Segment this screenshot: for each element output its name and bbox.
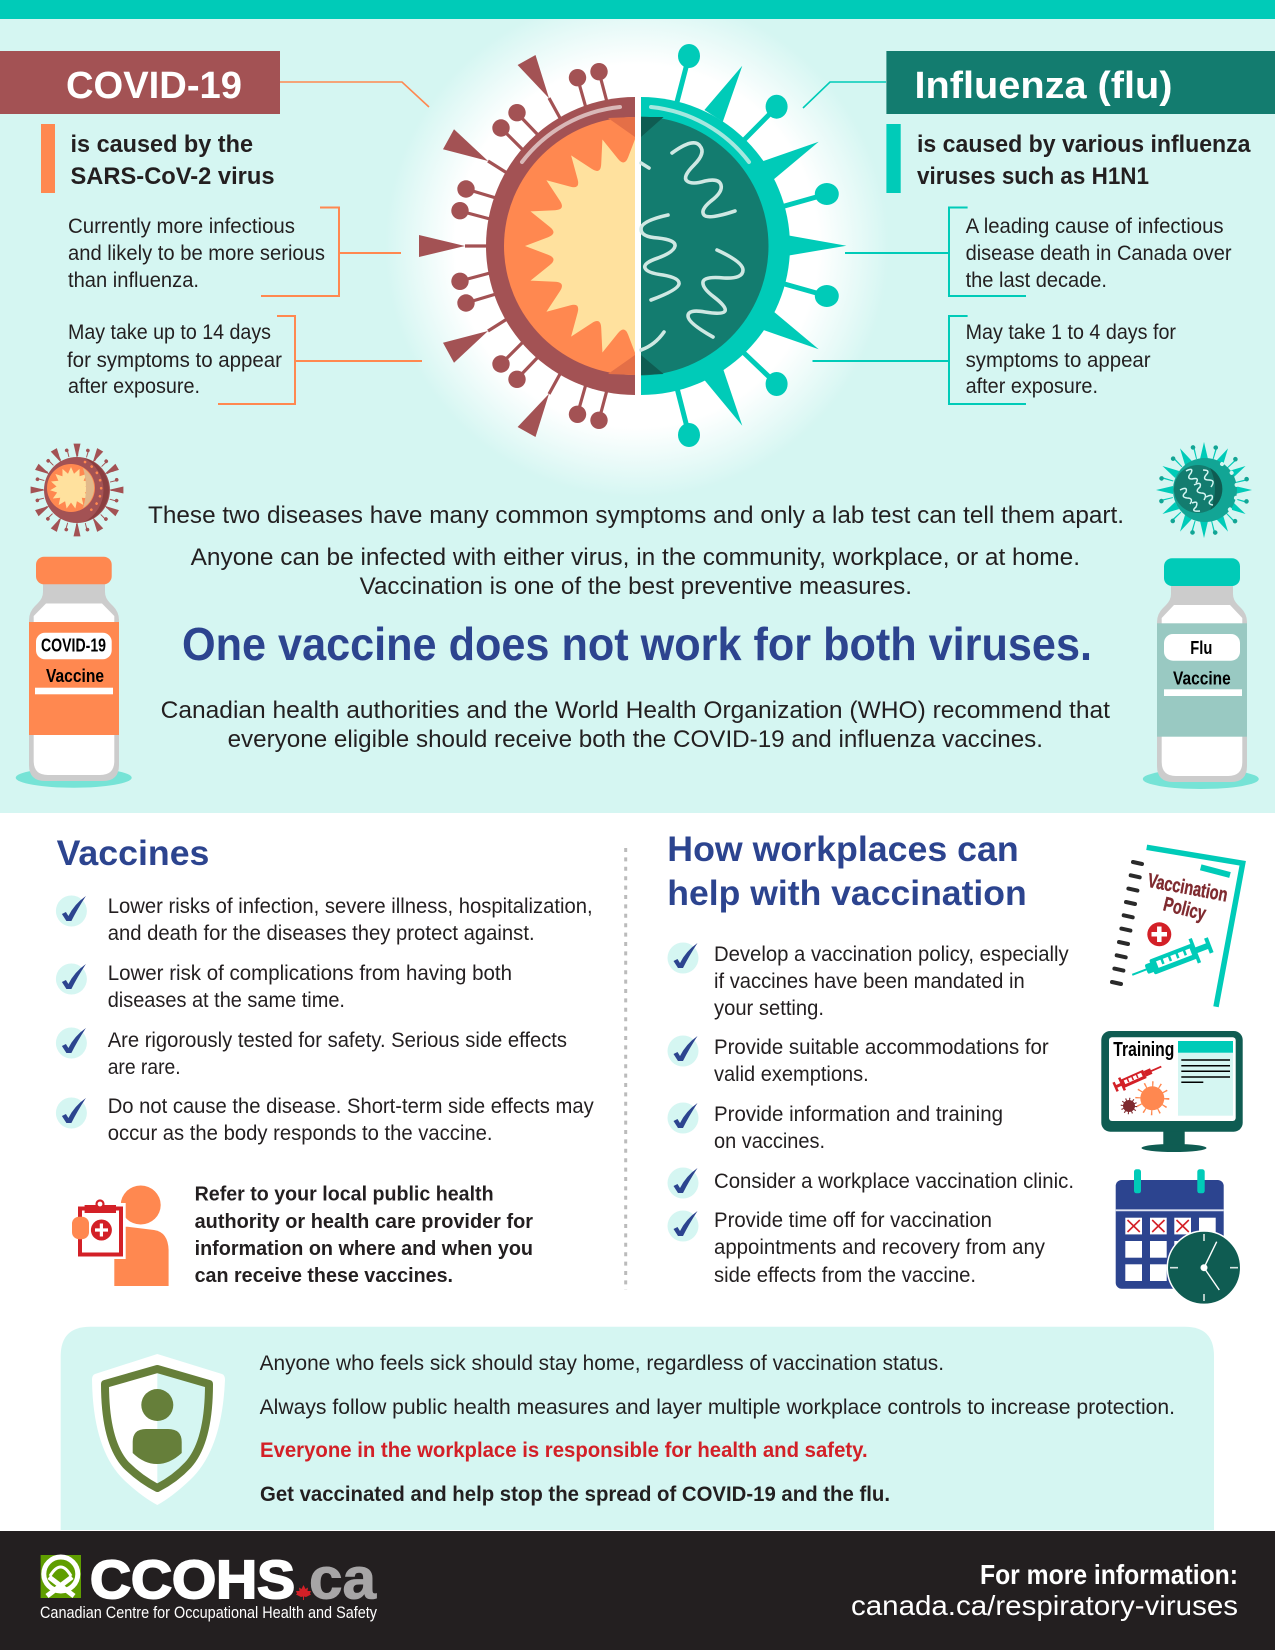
heading: COVID-19 bbox=[0, 51, 429, 114]
Influenza callout: mortality: the last decade. bbox=[966, 269, 1107, 292]
icon: COVID-19 vaccine bottle bbox=[16, 557, 132, 788]
COVID-19 cause: is caused by the bbox=[70, 131, 253, 158]
COVID-19 callout: incubation: for symptoms to appear bbox=[67, 349, 282, 372]
heading: how workplaces can help bbox=[667, 830, 1027, 913]
heading: COVID-19: COVID-19 bbox=[66, 65, 242, 107]
list item: side effects: Do not cause the disease. Short-term side effects may bbox=[108, 1095, 594, 1118]
footer bbox=[0, 1531, 1275, 1650]
Influenza callout: mortality: disease death in Canada over bbox=[966, 242, 1232, 265]
Influenza cause: viruses such as H1N1 bbox=[917, 163, 1149, 190]
COVID-19 callout: incubation bbox=[67, 316, 422, 404]
text: refer to local public health: authority or health care provider for bbox=[195, 1210, 533, 1233]
list item: lower risks bbox=[56, 895, 593, 945]
list item: training: on vaccines. bbox=[714, 1130, 825, 1153]
text: refer to local public health bbox=[195, 1183, 533, 1287]
list item: policy: if vaccines have been mandated in bbox=[714, 970, 1025, 993]
icon: vaccination policy notebook: Vaccination bbox=[1146, 870, 1229, 907]
logo: CCOHS: ca bbox=[309, 1546, 377, 1612]
COVID-19 callout: incubation: after exposure. bbox=[68, 375, 200, 398]
logo: CCOHS: Canadian Centre for Occupational Health and Safety bbox=[40, 1603, 377, 1622]
list item: time off: side effects from the vaccine. bbox=[714, 1264, 976, 1287]
list item: safety: are rare. bbox=[108, 1056, 181, 1079]
list item: safety: Are rigorously tested for safety. Serious side effects bbox=[108, 1029, 567, 1052]
text: recommendation: Canadian health authorities and the World Health Organization (WHO) recommend that bbox=[161, 697, 1110, 724]
COVID-19 callout: severity: than influenza. bbox=[68, 269, 199, 292]
icon: flu vaccine bottle: Vaccine bbox=[1173, 668, 1231, 688]
icon: person with clipboard bbox=[72, 1186, 169, 1286]
icon: central split virus bbox=[419, 44, 846, 447]
Influenza callout: incubation: after exposure. bbox=[966, 375, 1098, 398]
icon: small COVID virus bbox=[31, 444, 123, 536]
list item: time off bbox=[668, 1209, 1045, 1287]
COVID-19 cause bbox=[41, 124, 274, 193]
list item: policy: Develop a vaccination policy, especially bbox=[714, 943, 1069, 966]
heading: Influenza: Influenza (flu) bbox=[914, 65, 1172, 107]
heading: vaccines: Vaccines bbox=[57, 834, 209, 873]
text: common symptoms: These two diseases have many common symptoms and only a lab test can tell them apart. bbox=[148, 502, 1124, 529]
icon: shield with person bbox=[92, 1354, 225, 1505]
list item: side effects: occur as the body responds to the vaccine. bbox=[108, 1122, 492, 1145]
text: more information link: canada.ca/respiratory-viruses bbox=[851, 1590, 1238, 1621]
list item: policy bbox=[668, 942, 1069, 1020]
panel: workplaces bbox=[667, 830, 1074, 1287]
Influenza callout: mortality bbox=[845, 208, 1232, 296]
Influenza callout: incubation bbox=[812, 316, 1176, 404]
icon: COVID-19 vaccine bottle: COVID-19 bbox=[41, 636, 106, 656]
icon: training monitor bbox=[1101, 1031, 1243, 1152]
list item: accommodations bbox=[668, 1036, 1049, 1086]
icon: vaccination policy notebook: Policy bbox=[1161, 894, 1209, 925]
COVID-19 callout: severity bbox=[68, 208, 401, 296]
panel: vaccines bbox=[56, 834, 594, 1145]
text: more information link bbox=[851, 1559, 1238, 1621]
Influenza callout: mortality: A leading cause of infectious bbox=[966, 215, 1224, 238]
list item: time off: Provide time off for vaccination bbox=[714, 1209, 992, 1232]
text: refer to local public health: can receive these vaccines. bbox=[195, 1264, 453, 1287]
list item: complications: Lower risk of complications from having both bbox=[108, 962, 512, 985]
logo: CCOHS bbox=[40, 1546, 377, 1622]
icon: training monitor: Training bbox=[1113, 1039, 1174, 1061]
COVID-19 callout: severity: Currently more infectious bbox=[68, 215, 295, 238]
headline: one vaccine: One vaccine does not work for both viruses. bbox=[182, 618, 1092, 670]
text: recommendation bbox=[161, 697, 1110, 753]
heading: how workplaces can help: How workplaces can bbox=[667, 830, 1019, 869]
list item: training: Provide information and training bbox=[714, 1103, 1003, 1126]
heading: Influenza bbox=[803, 51, 1275, 114]
text: anyone can be infected: Anyone can be infected with either virus, in the community, workplace, or at home. bbox=[191, 544, 1080, 571]
icon: vaccination policy notebook bbox=[1112, 847, 1243, 1007]
list item: accommodations: Provide suitable accommodations for bbox=[714, 1036, 1049, 1059]
list item: safety bbox=[56, 1028, 567, 1079]
text: anyone can be infected: Vaccination is one of the best preventive measures. bbox=[360, 573, 912, 600]
influenza half of virus bbox=[639, 44, 846, 447]
icon: flu vaccine bottle bbox=[1143, 558, 1259, 789]
Influenza cause bbox=[886, 124, 1251, 193]
COVID-19 callout: severity: and likely to be more serious bbox=[68, 242, 325, 265]
logo: CCOHS: CCOHS bbox=[90, 1550, 295, 1610]
text: more information link: For more information: bbox=[980, 1559, 1238, 1590]
list item: time off: appointments and recovery from any bbox=[714, 1236, 1045, 1259]
list item: lower risks: Lower risks of infection, severe illness, hospitalization, bbox=[108, 895, 593, 918]
COVID-19 cause: SARS-CoV-2 virus bbox=[70, 163, 274, 190]
Influenza cause: is caused by various influenza bbox=[917, 131, 1251, 158]
text: anyone can be infected bbox=[191, 544, 1080, 600]
Influenza callout: incubation: May take 1 to 4 days for bbox=[966, 321, 1176, 344]
text: refer to local public health: information on where and when you bbox=[195, 1237, 533, 1260]
icon: calendar with clock bbox=[1116, 1169, 1241, 1304]
COVID-19 callout: incubation: May take up to 14 days bbox=[68, 321, 271, 344]
list item: side effects bbox=[56, 1095, 594, 1145]
icon: small flu virus bbox=[1156, 442, 1252, 538]
text: refer to local public health: Refer to your local public health bbox=[195, 1183, 494, 1206]
text: responsibility: Everyone in the workplace is responsible for health and safety. bbox=[260, 1439, 868, 1462]
text: recommendation: everyone eligible should receive both the COVID-19 and influenza vaccines. bbox=[228, 726, 1043, 753]
list item: complications: diseases at the same time. bbox=[108, 989, 345, 1012]
COVID half of virus bbox=[419, 55, 635, 437]
text: get vaccinated: Get vaccinated and help stop the spread of COVID-19 and the flu. bbox=[260, 1483, 890, 1506]
text: layer controls: Always follow public health measures and layer multiple workplace controls to increase protection. bbox=[260, 1396, 1175, 1419]
top background panel bbox=[0, 0, 1275, 813]
list item: accommodations: valid exemptions. bbox=[714, 1063, 869, 1086]
list item: clinic bbox=[668, 1168, 1074, 1198]
list item: lower risks: and death for the diseases they protect against. bbox=[108, 922, 535, 945]
icon: COVID-19 vaccine bottle: Vaccine bbox=[46, 666, 104, 686]
icon: flu vaccine bottle: Flu bbox=[1190, 638, 1212, 658]
text: stay home: Anyone who feels sick should stay home, regardless of vaccination status. bbox=[260, 1352, 944, 1375]
list item: clinic: Consider a workplace vaccination clinic. bbox=[714, 1170, 1074, 1193]
list item: policy: your setting. bbox=[714, 997, 824, 1020]
list item: training bbox=[668, 1102, 1003, 1153]
Influenza callout: incubation: symptoms to appear bbox=[966, 349, 1151, 372]
panel: stay home reminders bbox=[61, 1327, 1214, 1530]
list item: complications bbox=[56, 962, 512, 1012]
heading: how workplaces can help: help with vaccination bbox=[667, 874, 1027, 913]
